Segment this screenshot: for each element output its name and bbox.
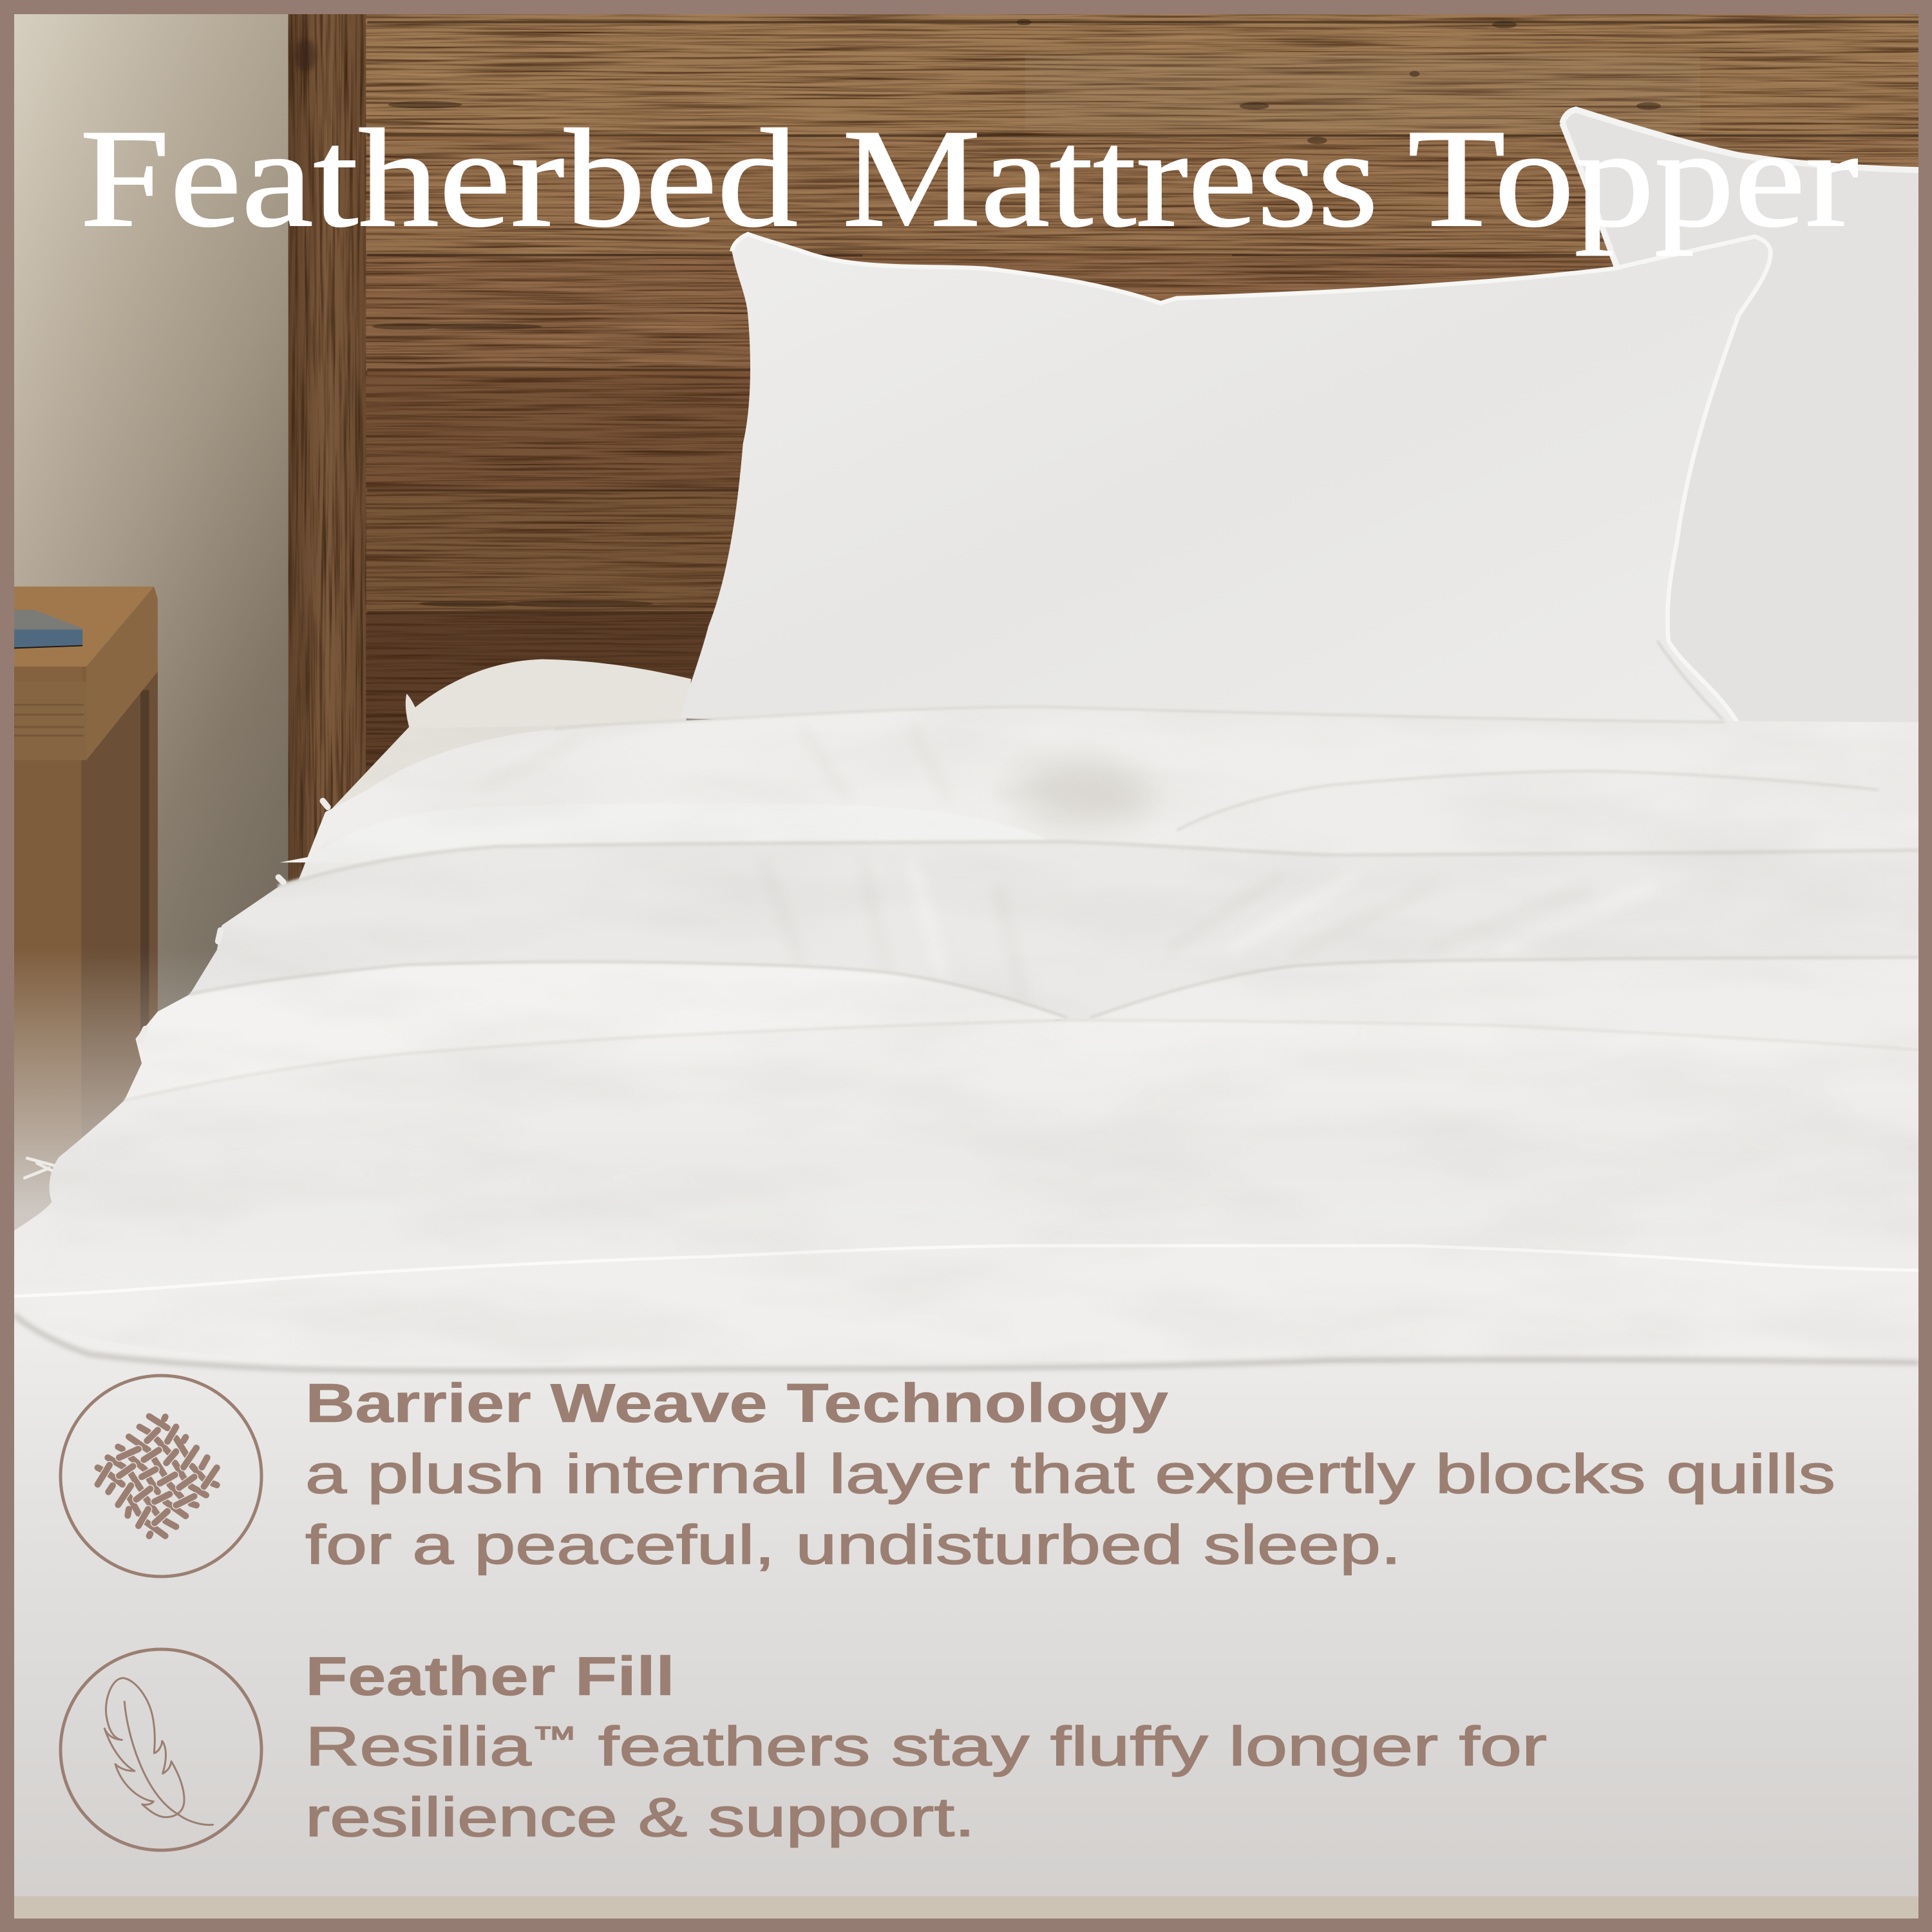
fourth row tufts xyxy=(124,958,1918,1101)
third row wrinkles xyxy=(279,842,1918,998)
front bolster xyxy=(14,1020,1918,1298)
icon: feather xyxy=(61,1649,261,1850)
title: Featherbed xyxy=(80,101,798,256)
front pillow xyxy=(680,234,1770,726)
back pillow xyxy=(1560,107,1918,727)
upper topper row xyxy=(296,706,1918,887)
upper crease shadow xyxy=(480,706,1725,827)
text block: feather fill xyxy=(305,1646,1547,1848)
title xyxy=(80,101,1859,256)
second row tufts xyxy=(279,771,1918,862)
floor strip xyxy=(14,1897,1918,1918)
text block: feather fill: Resilia xyxy=(305,1716,469,1777)
text block: feather fill: Feather Fill xyxy=(305,1646,675,1707)
headboard planks xyxy=(363,14,1918,864)
text block: feather fill: ™ xyxy=(531,1720,577,1757)
cloth texture xyxy=(485,1063,523,1078)
left fade xyxy=(14,949,292,1368)
text block: barrier weave: for a peaceful, undisturbed sleep. xyxy=(305,1515,1401,1576)
wall xyxy=(14,14,292,1357)
small left pillow xyxy=(325,659,691,816)
third row xyxy=(190,842,1918,1035)
nightstand xyxy=(14,587,158,1257)
bed base xyxy=(14,1306,1918,1918)
text block: barrier weave: Barrier Weave Technology xyxy=(305,1373,1168,1434)
text block: barrier weave: a plush internal layer that expertly blocks quills xyxy=(305,1444,1835,1505)
text block: feather fill: resilience & support. xyxy=(305,1787,975,1848)
headboard post xyxy=(289,14,366,901)
text block: feather fill: feathers stay fluffy longer for xyxy=(577,1716,1547,1777)
title: Topper xyxy=(1408,101,1859,256)
bolster details xyxy=(14,1020,1918,1371)
icon: weave xyxy=(61,1376,261,1577)
topper side panel xyxy=(14,1245,1918,1370)
title: Mattress xyxy=(842,101,1378,256)
text block: barrier weave xyxy=(305,1373,1835,1576)
wood knots xyxy=(372,19,1661,607)
ruffled edges and loose feather xyxy=(24,801,328,1178)
